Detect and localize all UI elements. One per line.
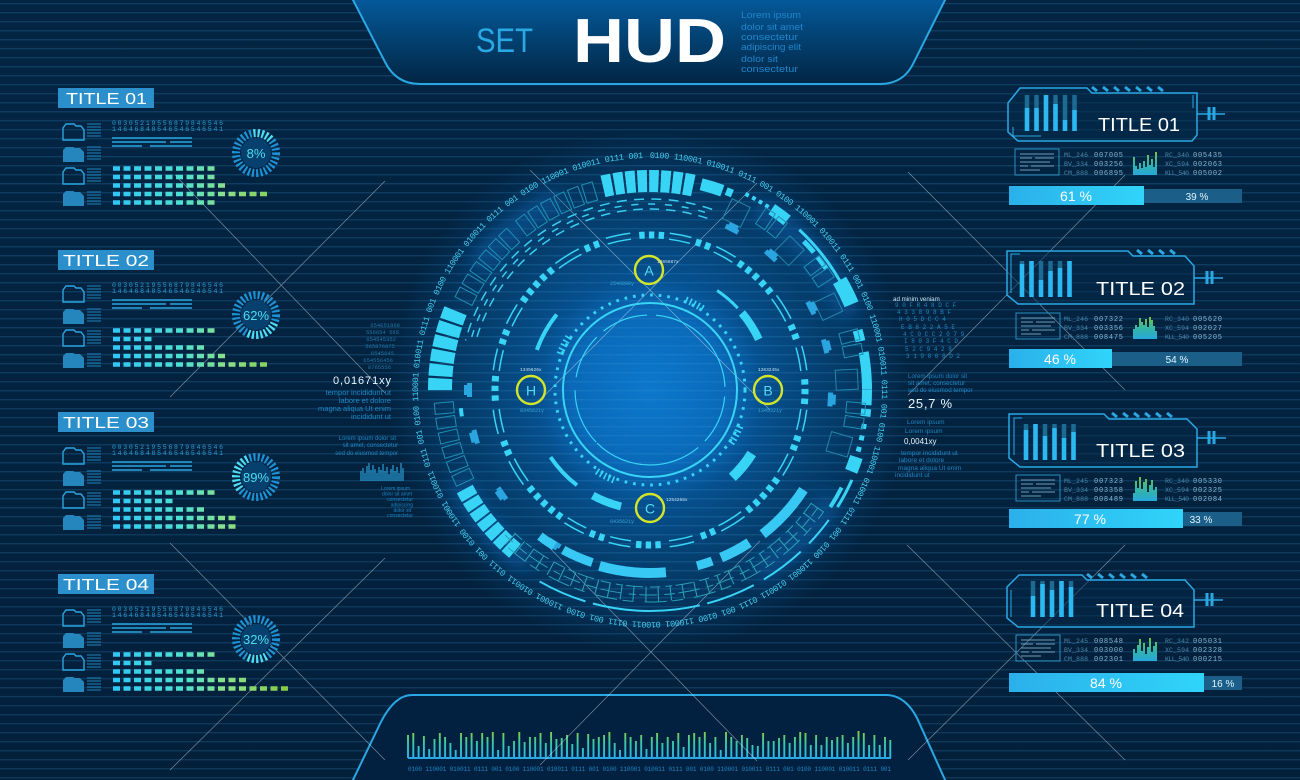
text icon box — [1015, 149, 1059, 175]
data readouts: 005330 — [1193, 478, 1222, 486]
outlined rectangles ring — [434, 182, 866, 486]
title: set: SET — [476, 22, 533, 60]
marker B — [754, 367, 782, 414]
data readouts: KLL_540 — [1165, 496, 1189, 503]
small note: consectetur — [387, 497, 413, 503]
data text: 00305219556879846546 — [112, 444, 223, 451]
data readouts: 002084 — [1193, 496, 1222, 504]
gauge 62%: 62% — [243, 308, 269, 323]
note — [895, 450, 961, 479]
title: TITLE 03 — [1096, 441, 1185, 461]
number column: 654545352 — [366, 336, 396, 343]
data readouts: RC_340 — [1165, 478, 1189, 485]
diagonal thin lines — [170, 170, 1125, 770]
data readouts: 003256 — [1094, 161, 1123, 169]
folder icons — [63, 124, 101, 206]
note: tempor incididunt ut — [901, 450, 958, 457]
header note: adipiscing elit — [741, 42, 802, 52]
note two — [335, 436, 398, 457]
letter matrix: 4 3 3 8 9 8 B F — [897, 309, 951, 316]
progress bar: 54 % — [1166, 355, 1189, 366]
data readouts: 005002 — [1193, 170, 1222, 178]
marker A: 2546890y — [610, 281, 634, 287]
data text — [112, 444, 223, 457]
number column: 654651868 — [370, 322, 400, 329]
bright segmented outer ring — [429, 169, 871, 611]
data readouts: 003358 — [1094, 487, 1123, 495]
small note: dolor sit amet — [382, 492, 413, 498]
value 25,7: 25,7 % — [908, 396, 952, 411]
left panel 04 — [58, 574, 288, 692]
right panel 03 — [1009, 413, 1242, 528]
data readouts: 002325 — [1193, 487, 1222, 495]
header note: dolor sit — [741, 54, 779, 64]
progress bar: 84 % — [1090, 675, 1122, 691]
middle tick ring — [492, 232, 808, 548]
folder icons — [63, 610, 101, 692]
data text: 14646848546546546541 — [112, 612, 223, 619]
data readouts: 000215 — [1193, 656, 1222, 664]
gauge 89%: 89% — [243, 470, 269, 485]
marker B: 1345321y — [758, 408, 782, 414]
small note: Lorem ipsum — [381, 486, 410, 492]
title 03: TITLE 03 — [63, 415, 149, 432]
data readouts: 002027 — [1193, 325, 1222, 333]
central radial glow — [388, 128, 912, 652]
data readouts: KLL_540 — [1165, 656, 1189, 663]
small note: consectetur — [387, 513, 413, 519]
letter matrix: 4 C 0 C C 2 0 7 9 — [903, 331, 965, 338]
small note: adipiscing — [391, 502, 413, 508]
data text: 00305219556879846546 — [112, 120, 223, 127]
small note: dolor sit — [393, 508, 412, 514]
level bars — [1022, 261, 1070, 297]
marker H: 8345621y — [520, 408, 544, 414]
data readouts: BV_334 — [1064, 161, 1088, 168]
marker C: C — [645, 500, 655, 516]
header note: consectetur — [741, 32, 798, 42]
square bars — [113, 330, 270, 364]
letter matrix: 5 2 C 9 4 2 8 — [905, 346, 952, 353]
title: TITLE 02 — [1096, 279, 1185, 299]
number column: 6545645 — [371, 350, 394, 357]
text lines — [112, 462, 192, 470]
inner rings — [553, 293, 747, 487]
mini chart — [1134, 477, 1156, 501]
title: hud: HUD — [573, 7, 726, 76]
bottom chart axis labels: 0100 110001 010011 0111 001 0100 110001 010011 0111 001 0100 110001 010011 0111 001 0100 110001 010011 0111 001 0100 110001 010011 0111 001 — [408, 766, 891, 773]
labels: Lorem ipsum — [905, 428, 943, 435]
mini chart — [1134, 638, 1156, 661]
data readouts: XC_594 — [1165, 487, 1189, 494]
data readouts: 007322 — [1094, 316, 1123, 324]
header note: consectetur — [741, 64, 798, 74]
note two: sit amet, consectetur — [343, 443, 398, 449]
header note: dolor sit amet — [741, 22, 804, 32]
bottom bar chart — [408, 731, 890, 758]
data readouts — [1064, 478, 1222, 504]
right data block — [893, 296, 973, 479]
data readouts: KLL_540 — [1165, 170, 1189, 177]
folder icons — [63, 448, 101, 530]
note two: Lorem ipsum dolor sit — [339, 436, 396, 442]
data text — [112, 606, 223, 619]
mini bar chart — [361, 463, 403, 481]
data readouts: 008548 — [1094, 638, 1123, 646]
value: 0,0041xy — [904, 437, 936, 446]
data text: 14646848546546546541 — [112, 288, 223, 295]
data readouts: CM_888 — [1064, 656, 1088, 663]
frame — [1008, 87, 1225, 141]
progress bar: 61 % — [1060, 188, 1092, 204]
note: magna aliqua Ut enim — [318, 404, 391, 413]
left panel 02 — [58, 250, 276, 368]
title 04 — [58, 574, 154, 594]
header panel — [352, 0, 946, 84]
note: sed do eiusmod tempor — [908, 387, 973, 394]
text lines — [112, 138, 192, 146]
progress bar: 46 % — [1044, 351, 1076, 367]
gauge 89% — [236, 457, 276, 497]
note: labore et dolore — [899, 457, 945, 464]
letter matrix: I 8 0 3 F 4 C D — [904, 338, 958, 345]
data readouts: 002301 — [1094, 656, 1123, 664]
title 01: TITLE 01 — [66, 91, 147, 108]
frame — [1007, 250, 1223, 304]
marker C: 6435621y — [610, 519, 634, 525]
letter matrix: 3 1 9 8 6 8 D 2 — [906, 353, 960, 360]
mini chart — [1134, 152, 1156, 175]
data readouts — [1064, 152, 1222, 178]
note: tempor incididunt ut — [326, 388, 392, 397]
progress bar: 39 % — [1186, 192, 1209, 203]
right panel 04 — [1007, 574, 1242, 692]
data text: 00305219556879846546 — [112, 282, 223, 289]
data readouts: 003356 — [1094, 325, 1123, 333]
note two: sed do eiusmod tempor — [335, 451, 398, 457]
data readouts: 007323 — [1094, 478, 1123, 486]
data readouts: CM_888 — [1064, 496, 1088, 503]
note: incididunt ut — [351, 412, 392, 421]
data readouts: XC_594 — [1165, 325, 1189, 332]
title 04: TITLE 04 — [63, 577, 150, 594]
progress bar — [1009, 349, 1242, 368]
data readouts: BV_334 — [1064, 325, 1088, 332]
text lines — [112, 300, 192, 308]
data readouts: ML_246 — [1064, 316, 1088, 323]
blue clip markers — [464, 221, 836, 551]
left data block — [318, 322, 413, 519]
number column: 556654 565 — [366, 329, 399, 336]
marker A: A — [644, 262, 654, 278]
title 01 — [58, 88, 154, 108]
data readouts: RC_340 — [1165, 152, 1189, 159]
data readouts: 008489 — [1094, 496, 1123, 504]
marker H: H — [526, 382, 536, 398]
data text — [112, 282, 223, 295]
note: magna aliqua Ut enim — [898, 465, 961, 472]
note: incididunt ut — [895, 472, 930, 479]
marker C — [610, 494, 688, 525]
marker A: 1265687x — [657, 259, 679, 265]
data readouts: ML_245 — [1064, 638, 1088, 645]
progress bar: 77 % — [1074, 511, 1106, 527]
labels — [905, 419, 945, 435]
mini chart — [1134, 317, 1156, 339]
square bars — [113, 654, 288, 688]
data readouts — [1064, 638, 1222, 664]
gauge 32% — [236, 619, 276, 659]
text icon box — [1016, 635, 1060, 661]
labels: Lorem ipsum — [907, 419, 945, 426]
small note — [381, 486, 413, 519]
progress bar: 33 % — [1190, 515, 1213, 526]
text icon box — [1016, 313, 1060, 339]
square bars — [113, 492, 239, 526]
data readouts — [1064, 316, 1222, 342]
note: labore et dolore — [339, 396, 391, 405]
marker C: 1254268x — [666, 497, 688, 503]
letter matrix — [895, 302, 965, 360]
letter matrix: 9 0 F R 4 8 D C F — [895, 302, 957, 309]
frame — [1007, 574, 1223, 627]
progress bar — [1009, 673, 1242, 692]
text icon box — [1016, 475, 1060, 501]
gauge 8%: 8% — [247, 146, 266, 161]
circuit ring — [500, 502, 824, 602]
data text: 14646848546546546541 — [112, 450, 223, 457]
number column: 8765556 — [368, 364, 391, 371]
data readouts: 002328 — [1193, 647, 1222, 655]
matrix heading: ad minim veniam — [893, 296, 940, 303]
gauge 32%: 32% — [243, 632, 269, 647]
data readouts: 005620 — [1193, 316, 1222, 324]
title: TITLE 01 — [1098, 115, 1180, 135]
note: sit amet, consectetur — [908, 380, 965, 387]
data readouts: CM_888 — [1064, 334, 1088, 341]
data readouts: 008475 — [1094, 334, 1123, 342]
data readouts: XC_594 — [1165, 161, 1189, 168]
title 02: TITLE 02 — [63, 253, 149, 270]
marker B: B — [763, 382, 773, 398]
central HUD dial — [412, 152, 888, 628]
letter matrix: E B 8 2 2 A 5 E — [901, 324, 955, 331]
number column: 654556456 — [363, 357, 393, 364]
title 03 — [58, 412, 154, 432]
letter matrix: H 0 5 D C C 4 — [899, 316, 946, 323]
bottom panel — [352, 695, 946, 780]
data readouts: BV_334 — [1064, 487, 1088, 494]
left panel 03 — [58, 412, 276, 530]
marker A — [610, 256, 679, 287]
data readouts: 003000 — [1094, 647, 1123, 655]
header note: Lorem ipsum — [741, 10, 801, 20]
right panel 02 — [1007, 250, 1242, 368]
title: TITLE 04 — [1096, 601, 1184, 621]
number column — [363, 322, 400, 371]
data text — [112, 120, 223, 133]
note — [908, 373, 973, 394]
progress bar — [1009, 509, 1242, 528]
data readouts: RC_340 — [1165, 316, 1189, 323]
data text: 00305219556879846546 — [112, 606, 223, 613]
data readouts: BV_334 — [1064, 647, 1088, 654]
data readouts: ML_245 — [1064, 478, 1088, 485]
data readouts: ML_246 — [1064, 152, 1088, 159]
r120 arcs — [530, 270, 770, 510]
progress bar: 16 % — [1212, 679, 1235, 690]
text lines — [112, 624, 192, 632]
outer binary text ring: 0100 110001 010011 0111 001 0100 110001 010011 0111 001 0100 110001 010011 0111 001 0100 110001 010011 0111 001 0100 110001 010011 0111 001 0100 110001 010011 0111 001 0100 110001 010011 0111 001 0100 110001 010011 0111 001 0100 110001 010011 0111 001 0100 110001 010011 0111 001 0100 110001 010011 0111 001 — [412, 152, 888, 628]
folder icons — [63, 286, 101, 368]
data readouts: RC_342 — [1165, 638, 1189, 645]
second segmented arc ring — [467, 207, 833, 573]
level bars — [1026, 424, 1074, 460]
data readouts: 005205 — [1193, 334, 1222, 342]
progress bar — [1009, 186, 1242, 205]
data readouts: 007005 — [1094, 152, 1123, 160]
data readouts: KLL_540 — [1165, 334, 1189, 341]
square bars — [113, 168, 270, 202]
data readouts: XC_594 — [1165, 647, 1189, 654]
marker B: 1263245x — [758, 367, 780, 373]
value: 0,01671xy — [333, 375, 392, 387]
marker H: 1345626x — [520, 367, 542, 373]
data readouts: CM_888 — [1064, 170, 1088, 177]
ring soft glows — [438, 178, 862, 602]
note: Lorem ipsum dolor sit — [908, 373, 967, 380]
marker H — [517, 367, 545, 414]
number column: 565876875 — [365, 343, 395, 350]
thin lower outer arcs — [429, 169, 871, 611]
gauge 8% — [236, 133, 276, 173]
note — [318, 388, 392, 421]
title 02 — [58, 250, 154, 270]
frame — [1009, 413, 1226, 467]
tick line ring — [464, 198, 712, 341]
data readouts: 002063 — [1193, 161, 1222, 169]
level bars — [1033, 581, 1071, 617]
left panel 01 — [58, 88, 276, 206]
data readouts: 005031 — [1193, 638, 1222, 646]
data readouts: 005435 — [1193, 152, 1222, 160]
data readouts: 006895 — [1094, 170, 1123, 178]
data text: 14646848546546546541 — [112, 126, 223, 133]
right panel 01 — [1008, 87, 1242, 205]
gauge 62% — [236, 295, 276, 335]
header note — [741, 10, 804, 74]
level bars — [1027, 95, 1074, 131]
